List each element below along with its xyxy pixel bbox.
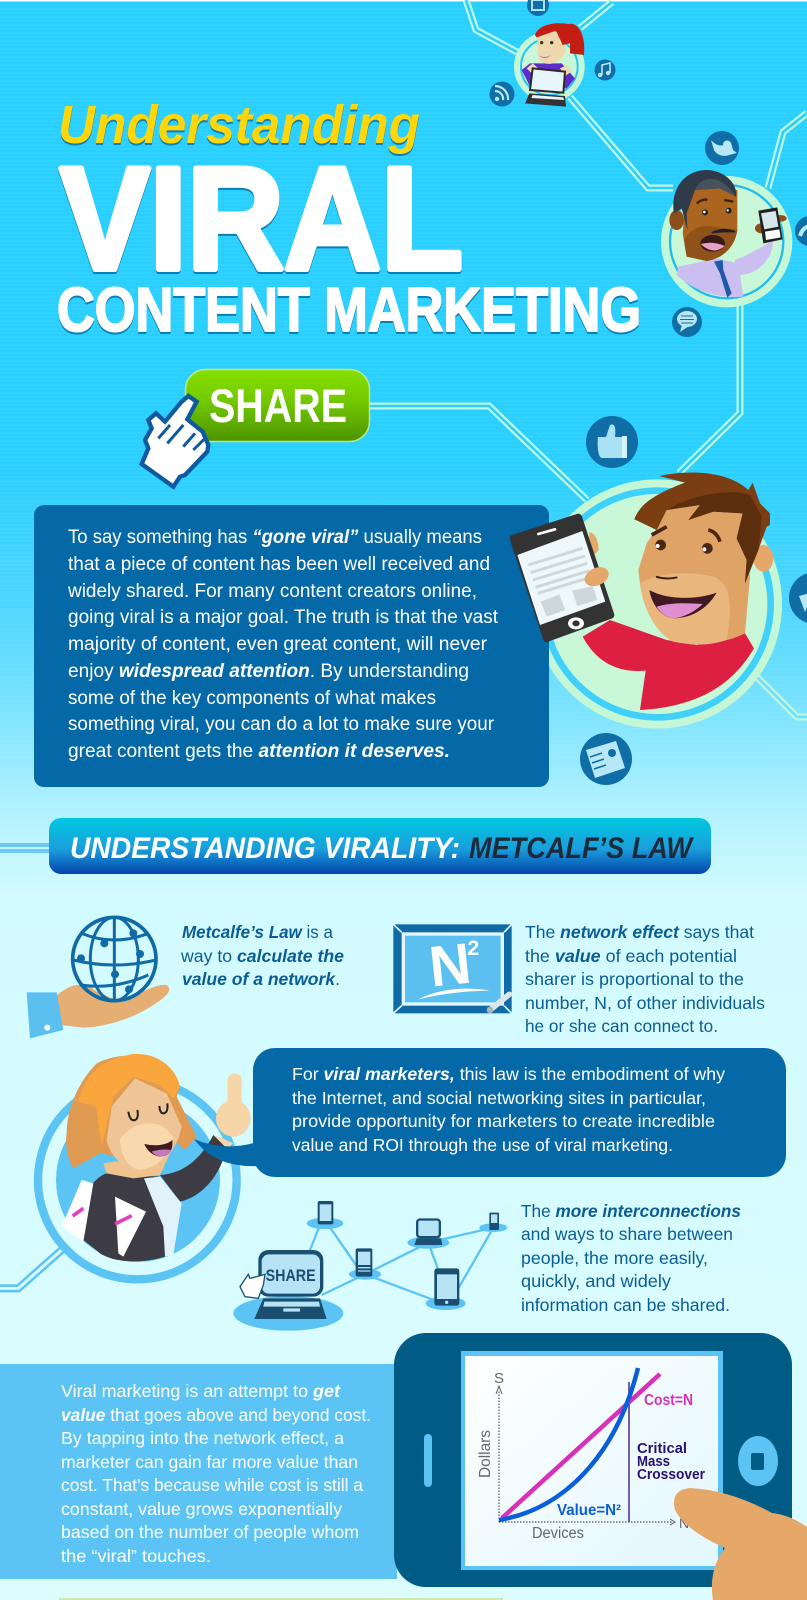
smartphone with chart: [394, 1333, 792, 1587]
network diagram of devices: [233, 1201, 507, 1331]
text: network effect: the value of each potential: [525, 946, 737, 966]
character: businesswoman presenting: [0, 1054, 251, 1288]
intro paragraph: [67, 527, 499, 762]
text: Metcalfe's Law: [180, 922, 344, 989]
icon: thumbs up: [586, 416, 638, 468]
share button: [186, 370, 370, 442]
share button: SHARE: [209, 379, 347, 432]
chart: cost vs value: Critical: [637, 1441, 687, 1457]
icon: N squared chalkboard: 2: [467, 936, 479, 960]
bubble text: For viral marketers, this law is the embodiment of why: [292, 1064, 725, 1084]
text: interconnections: information can be shared.: [521, 1295, 730, 1315]
text: network effect: he or she can connect to.: [525, 1016, 718, 1036]
network connector lines: [370, 0, 807, 717]
icon: pixel hand cursor: [142, 396, 208, 487]
text: network effect: sharer is proportional to the: [525, 969, 744, 989]
chart: cost vs value: Devices: [532, 1525, 584, 1542]
chart: cost vs value: Mass: [637, 1454, 670, 1470]
text: network effect: number, N, of other individuals: [525, 993, 765, 1013]
portrait ring: [537, 483, 778, 725]
title: [57, 95, 641, 345]
intro paragraph: great content gets the attention it deserves.: [68, 741, 450, 762]
text: network effect: The network effect says that: [525, 922, 754, 942]
intro paragraph: widely shared. For many content creators online,: [67, 581, 477, 602]
mouth: [649, 590, 717, 618]
panel text: the “viral” touches.: [61, 1546, 211, 1566]
icon: speech bubble: [672, 307, 702, 337]
shirt: [583, 620, 754, 710]
character: man on phone: [665, 170, 788, 303]
text: interconnections: people, the more easily,: [521, 1248, 708, 1268]
icon: star: [789, 572, 807, 624]
intro paragraph: going viral is a major goal. The truth is that the vast: [68, 607, 499, 628]
banner heading: UNDERSTANDING VIRALITY:: [70, 832, 460, 865]
text: interconnections: The more interconnections: [521, 1201, 741, 1221]
panel text: value that goes above and beyond cost.: [61, 1405, 371, 1425]
speech bubble: viral marketers: [194, 1048, 786, 1177]
panel: introduction: [34, 505, 549, 787]
text: network effect: [525, 922, 765, 1036]
chart: cost vs value: Value=N²: [557, 1502, 621, 1519]
icon: N squared chalkboard: N: [426, 932, 474, 1000]
text: Metcalfe's Law: way to calculate the: [180, 946, 344, 966]
chart: cost vs value: Cost=N: [644, 1392, 693, 1409]
devices: phones and laptop: [318, 1201, 499, 1306]
panel text: cost. That's because while cost is still a: [61, 1475, 363, 1495]
icon: newspaper: [580, 733, 632, 785]
device: laptop with share: [240, 1250, 327, 1319]
panel text: based on the number of people whom: [61, 1522, 359, 1542]
panel text: By tapping into the network effect, a: [61, 1428, 344, 1448]
title line: CONTENT MARKETING: CONTENT MARKETING: [57, 276, 641, 345]
panel: viral marketing value: [0, 1364, 397, 1579]
face: [638, 505, 750, 644]
icon: smartphone held by man: [513, 517, 612, 638]
next section banner edge: [59, 1598, 503, 1600]
icon: edge phone: [795, 216, 807, 246]
intro paragraph: some of the key components of what makes: [68, 688, 436, 709]
character: smiling man with smartphone: [537, 473, 778, 725]
panel text: marketer can gain far more value than: [61, 1452, 358, 1472]
bubble text: [292, 1064, 725, 1155]
panel text: Viral marketing is an attempt to get: [61, 1381, 341, 1401]
chart: cost vs value: Dollars: [477, 1430, 494, 1478]
icon: N squared chalkboard: [393, 924, 512, 1013]
intro paragraph: something viral, you can do a lot to make sure your: [68, 714, 495, 735]
chart: cost vs value: [477, 1368, 705, 1542]
device: laptop with share: SHARE: [266, 1266, 316, 1285]
intro paragraph: enjoy widespread attention. By understanding: [68, 661, 469, 682]
bubble text: value and ROI through the use of viral marketing.: [292, 1135, 673, 1155]
panel text: constant, value grows exponentially: [61, 1499, 342, 1519]
chart: cost vs value: N: [679, 1515, 689, 1531]
text: interconnections: [521, 1201, 741, 1315]
text: Metcalfe's Law: Metcalfe’s Law is a: [182, 922, 333, 942]
character: woman with laptop: [517, 23, 584, 107]
eyes: [655, 540, 666, 550]
section banner: [0, 818, 711, 874]
intro paragraph: To say something has “gone viral” usually means: [68, 527, 482, 548]
icon: twitter bird: [705, 131, 739, 165]
icon: music: [594, 60, 616, 80]
icon: hand holding globe: [27, 917, 169, 1038]
chart: cost vs value: Crossover: [637, 1467, 705, 1483]
intro paragraph: that a piece of content has been well received and: [68, 554, 490, 575]
banner subheading: METCALF’S LAW: [469, 832, 694, 865]
title line: VIRAL: VIRAL: [60, 137, 463, 300]
icon: rss: [490, 82, 514, 106]
bubble text: the Internet, and social networking sites in particular,: [292, 1088, 706, 1108]
chart: cost vs value: S: [494, 1370, 504, 1387]
text: Metcalfe's Law: value of a network.: [182, 969, 340, 989]
text: interconnections: quickly, and widely: [521, 1271, 671, 1291]
icon: top media: [527, 0, 549, 16]
text: interconnections: and ways to share between: [521, 1224, 733, 1244]
title line: Understanding: Understanding: [58, 95, 420, 155]
hair: [634, 473, 770, 583]
panel text: [61, 1381, 371, 1566]
intro paragraph: majority of content, even great content, will never: [68, 634, 488, 655]
bubble text: provide opportunity for marketers to create incredible: [292, 1111, 715, 1131]
icon: pointing finger: [674, 1488, 807, 1600]
